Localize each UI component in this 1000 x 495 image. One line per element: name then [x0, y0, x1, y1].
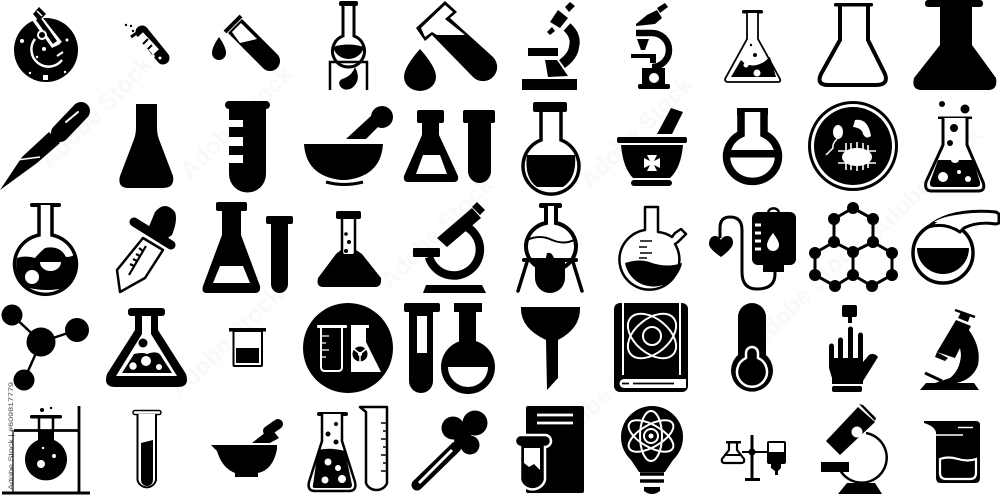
- icon: large black flask: [913, 0, 996, 90]
- icon: scalpel: [0, 111, 81, 190]
- icon: small test tube with bubbles: [125, 24, 163, 60]
- icon: microscope in circle: [14, 7, 78, 82]
- icon: large test tube with drop: [404, 1, 497, 91]
- icon: dropper: [117, 206, 176, 292]
- text: stock image id: Adobe Stock | #609817779: [8, 382, 15, 490]
- icon: outline erlenmeyer flask: [820, 3, 886, 85]
- icon: round flask with liquid: [14, 203, 77, 294]
- icon: thin test tube: [133, 410, 161, 487]
- watermark: Adobe Stock repeated: Adobe Stock: [375, 171, 498, 294]
- icon: mortar and pestle: [304, 106, 393, 184]
- watermark: Adobe Stock repeated: Adobe Stock: [865, 121, 988, 244]
- icon: IV bag with heart: [709, 208, 796, 289]
- icon: hexagon molecule lattice: [809, 202, 898, 292]
- icon: tube and round flask: [404, 303, 498, 397]
- icon: atom light bulb: [621, 406, 683, 494]
- icon: flask with dots: [318, 211, 381, 287]
- watermark: Adobe Stock repeated: Adobe Stock: [575, 71, 698, 194]
- icon: gloved hand with dropper: [829, 305, 878, 392]
- icon: mortar with cross: [617, 108, 687, 186]
- icon: flask on tripod: [518, 203, 582, 293]
- icon: flask and graduated tube: [309, 407, 387, 491]
- icon: round flask on stand: [330, 1, 367, 90]
- icon: pipette dropper: [417, 410, 488, 485]
- watermark: Adobe Stock repeated: Adobe Stock: [545, 331, 668, 454]
- icon: two-neck flask: [619, 207, 686, 290]
- icon: test tube with notches: [225, 101, 270, 193]
- icon: flask with liquid and bubbles: [106, 308, 187, 387]
- watermark: Adobe Stock repeated: Adobe Stock: [745, 231, 868, 354]
- watermark: Adobe Stock repeated: Adobe Stock: [165, 281, 288, 404]
- icon: petri dish with bacteria: [810, 102, 896, 190]
- icon: flask on lab stand: [2, 406, 90, 494]
- icon: tilted microscope: [920, 310, 979, 390]
- icon: angled microscope: [522, 2, 577, 90]
- icon: document and test tube: [515, 406, 584, 493]
- icon: funnel: [521, 307, 580, 390]
- icon: book with atom: [614, 303, 688, 392]
- icon: microscope with circle base: [631, 3, 670, 89]
- icon: round flask with band: [725, 108, 780, 181]
- icon: round flask half full: [523, 102, 579, 194]
- icon: beaker with wavy liquid: [924, 421, 980, 483]
- icon: microscope with arc: [413, 202, 486, 293]
- icon: large microscope: [821, 404, 887, 494]
- icon: flask and tube: [404, 110, 495, 183]
- watermark: Adobe Stock repeated: Adobe Stock: [35, 51, 158, 174]
- icon: flask with bubbles: [926, 101, 984, 191]
- icon: molecule: [2, 304, 89, 390]
- watermark: Adobe Stock repeated: Adobe Stock: [175, 61, 298, 184]
- icon: black erlenmeyer flask: [119, 104, 173, 188]
- icon: thin outline flask with liquid: [725, 10, 780, 82]
- icon: thermometer: [731, 303, 773, 392]
- icon: flask and tube solid: [202, 202, 293, 293]
- icon: small mortar and pestle: [211, 424, 279, 477]
- icon: lab balance with flask and bottle: [722, 435, 785, 481]
- icon: test tube pouring a drop: [212, 16, 280, 71]
- icon: circle with tube and flask: [303, 303, 393, 393]
- icon: small beaker: [229, 328, 266, 366]
- icon: retort flask: [913, 211, 999, 283]
- watermark: Adobe Stock repeated: [35, 51, 988, 454]
